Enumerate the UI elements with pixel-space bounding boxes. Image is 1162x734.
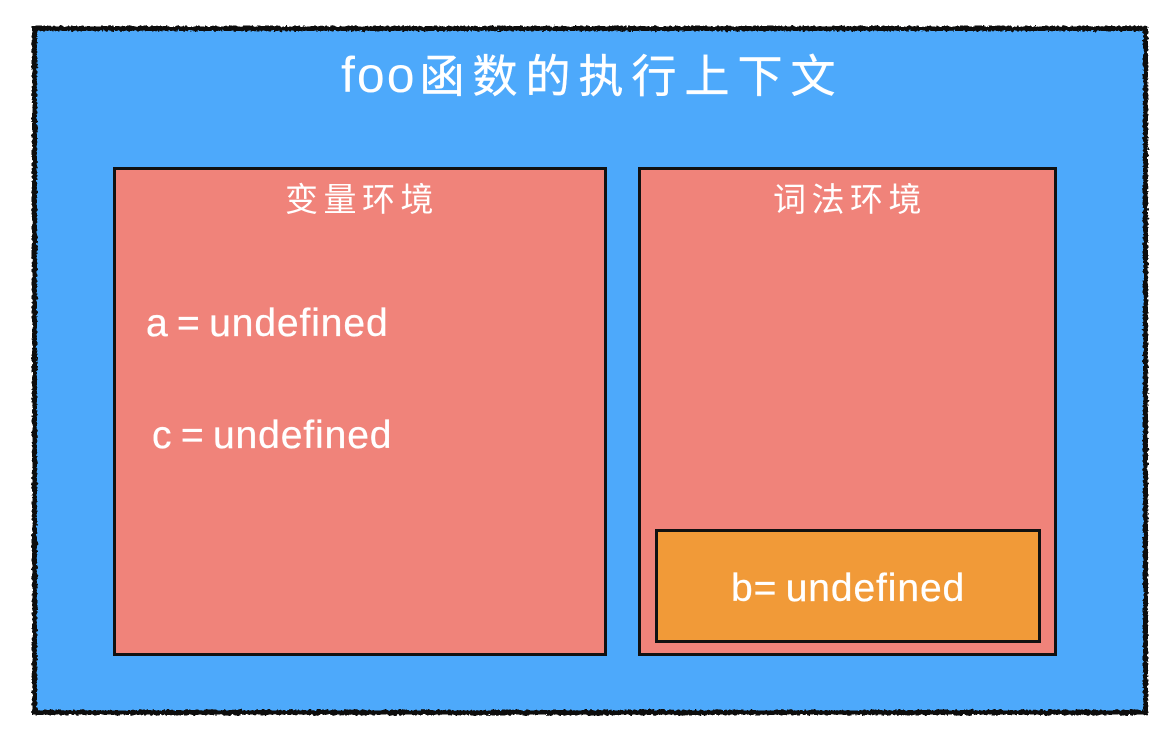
text: c = undefined: c = undefined <box>152 414 392 457</box>
panel: variable environment <box>113 167 607 656</box>
text: b= undefined: b= undefined <box>731 567 965 610</box>
heading: lexical environment: 词法环境 <box>773 181 927 218</box>
title: foo函数的执行上下文 <box>341 47 844 103</box>
text: a = undefined: a = undefined <box>146 302 389 345</box>
heading: variable environment: 变量环境 <box>285 181 439 218</box>
box: block scope variable <box>655 529 1041 643</box>
panel: lexical environment <box>638 167 1057 656</box>
